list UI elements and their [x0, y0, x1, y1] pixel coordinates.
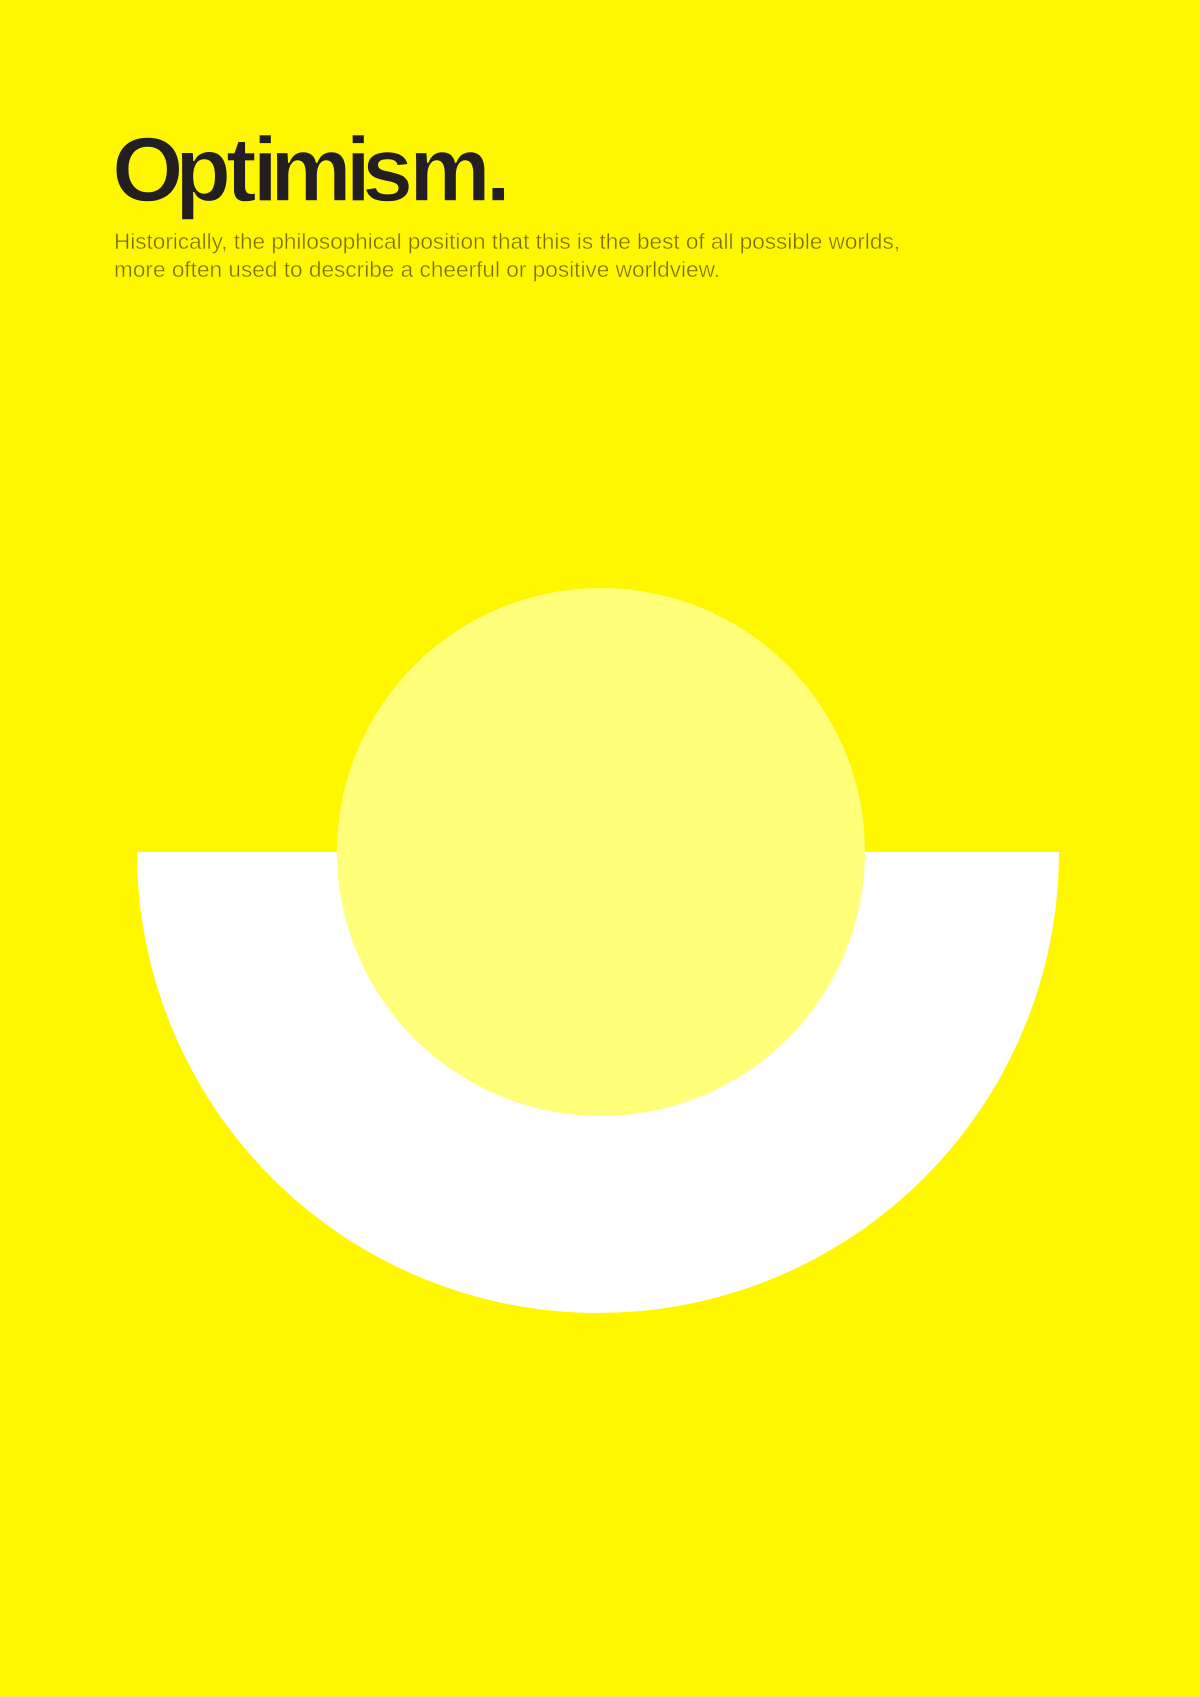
description text: Historically, the philosophical position that this is the best of all possible worlds, — [114, 229, 900, 254]
white semicircle — [137, 852, 1059, 1313]
description text: more often used to describe a cheerful or positive worldview. — [114, 257, 720, 282]
pale yellow circle — [337, 588, 865, 1116]
title: Optimism. — [112, 119, 511, 221]
description text — [114, 229, 900, 282]
